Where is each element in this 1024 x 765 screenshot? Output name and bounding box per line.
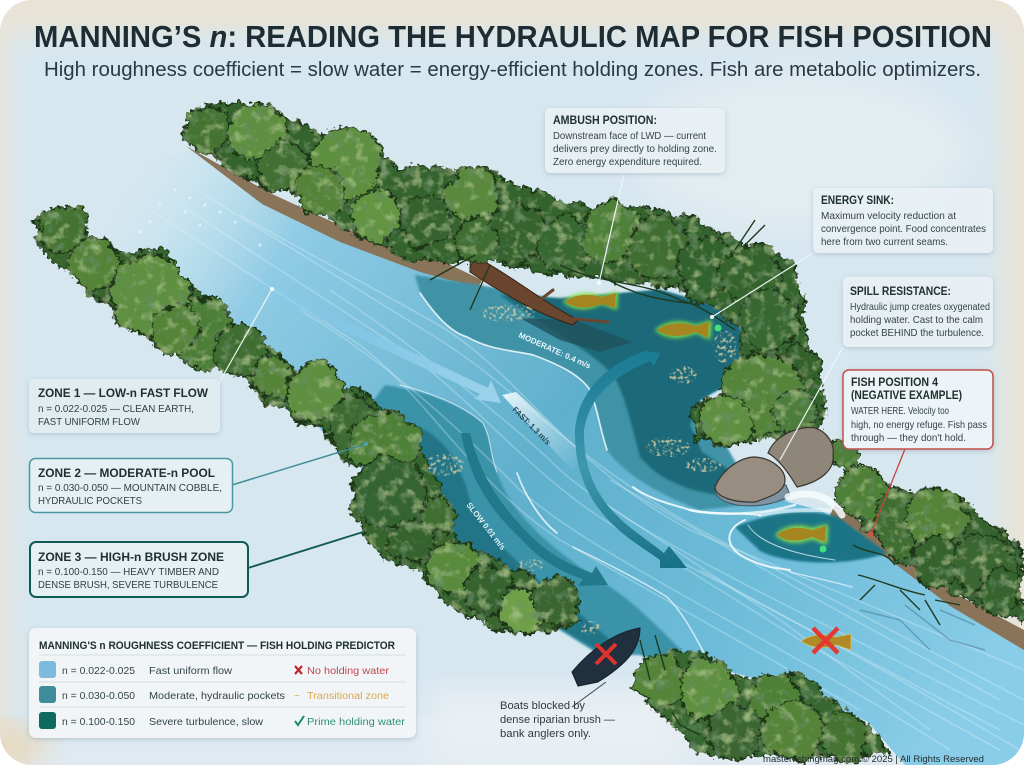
callout: energy sink: convergence point. Food concentrates [821, 223, 986, 235]
legend row 3 [39, 712, 406, 729]
rocks [715, 427, 833, 506]
leader: ambush [597, 174, 624, 285]
callout: zone 2: HYDRAULIC POCKETS [38, 496, 142, 507]
legend row 3: Severe turbulence, slow [149, 716, 263, 728]
title: MANNING’S n: READING THE HYDRAULIC MAP FOR FISH POSITION [34, 19, 992, 54]
moderate-n band lower [362, 384, 684, 658]
water streaks [150, 195, 1024, 750]
vegetation: left bank [32, 204, 580, 636]
eddy behind rocks [735, 512, 887, 563]
foam: hydraulic jump [690, 494, 842, 515]
legend row 2: n = 0.030-0.050 [62, 690, 135, 702]
callout: energy sink: here from two current seams. [821, 236, 948, 248]
legend row 1: n = 0.022-0.025 [62, 665, 135, 677]
velocity labels: SLOW 0.01 m/s [464, 501, 508, 552]
underwater log shadow [520, 318, 632, 352]
callout: zone 1: ZONE 1 — LOW-n FAST FLOW [38, 386, 209, 400]
legend row 2 [39, 686, 389, 703]
callout: spill resistance: SPILL RESISTANCE: [850, 284, 951, 298]
river [90, 146, 1024, 765]
leader: fish position 4 [868, 449, 905, 537]
moderate-n band upper [415, 275, 790, 510]
leader: zone 2 [232, 442, 368, 485]
high-n pool lower [400, 425, 610, 652]
fish: energy sink [655, 320, 712, 340]
callout: fish position 4 [843, 370, 993, 449]
gravel patches [425, 304, 737, 635]
arrow: slow current [461, 433, 608, 586]
subtitle: High roughness coefficient = slow water = energy-efficient holding zones. Fish are metabolic optimizers. [44, 59, 981, 81]
legend row 1: Fast uniform flow [149, 665, 232, 677]
callout: energy sink: ENERGY SINK: [821, 193, 894, 207]
callout: spill resistance: Hydraulic jump creates oxygenated [850, 301, 990, 313]
marker: energy sink [714, 324, 722, 332]
boats note [500, 700, 615, 740]
legend row 2: Transitional zone [307, 690, 389, 702]
callout: zone 3: DENSE BRUSH, SEVERE TURBULENCE [38, 580, 218, 591]
callout: zone 2 [30, 458, 232, 512]
log: large woody debris [470, 258, 608, 325]
boats note: dense riparian brush — [500, 714, 615, 726]
submerged branches [430, 220, 960, 735]
boat [572, 628, 640, 686]
legend title: MANNING'S n ROUGHNESS COEFFICIENT — FISH HOLDING PREDICTOR [39, 640, 395, 652]
callout: fish position 4: WATER HERE. Velocity too [851, 405, 949, 417]
fast label band [502, 392, 585, 470]
legend row 1 [39, 661, 390, 678]
boats note: bank anglers only. [500, 728, 591, 740]
leader: boats [572, 682, 606, 707]
arrow: fast current [230, 268, 585, 470]
legend row 2: Moderate, hydraulic pockets [149, 690, 285, 702]
callout: fish position 4: high, no energy refuge. Fish pass [851, 419, 987, 431]
fish: negative example [801, 628, 851, 653]
callout: zone 2: ZONE 2 — MODERATE-n POOL [38, 466, 215, 480]
callout: fish position 4: (NEGATIVE EXAMPLE) [851, 388, 962, 402]
legend row 1: No holding water [307, 665, 390, 677]
callout: fish position 4: FISH POSITION 4 [851, 375, 938, 389]
legend row 3: n = 0.100-0.150 [62, 716, 135, 728]
legend row 2: ~ [294, 690, 300, 702]
callout: zone 3: ZONE 3 — HIGH-n BRUSH ZONE [38, 550, 224, 564]
callout: spill resistance: pocket BEHIND the turbulence. [850, 327, 984, 339]
boats note: Boats blocked by [500, 700, 585, 712]
high-n pool upper [500, 290, 752, 498]
fish: spill resistance [775, 524, 828, 545]
callout: zone 1: FAST UNIFORM FLOW [38, 417, 141, 428]
callout: zone 1: n = 0.022-0.025 — CLEAN EARTH, [38, 404, 194, 415]
arrow: S-shaped eddy and main current [575, 351, 687, 568]
fish: ambush position [563, 291, 618, 310]
fast water channel [90, 150, 1024, 765]
velocity labels: MODERATE: 0.4 m/s [517, 331, 593, 371]
leader: zone 3 [248, 532, 363, 568]
callout: zone 3: n = 0.100-0.150 — HEAVY TIMBER AND [38, 567, 219, 578]
velocity labels [464, 331, 593, 552]
marker: spill resistance [820, 546, 826, 552]
white current lines [400, 293, 852, 670]
river banks [186, 146, 1024, 650]
callout: fish position 4: through — they don't hold. [851, 432, 966, 444]
callout: ambush position: Zero energy expenditure required. [553, 156, 702, 168]
branch reflections [860, 605, 985, 650]
callout: ambush position [545, 108, 725, 173]
vegetation: lower right bank [839, 466, 1022, 622]
callout: zone 3 [30, 542, 248, 597]
leader: energy sink [710, 253, 813, 319]
leader: zone 1 [220, 287, 274, 381]
legend [29, 628, 416, 738]
legend row 3: Prime holding water [307, 716, 406, 728]
callout: spill resistance [843, 277, 993, 347]
callout: energy sink: Maximum velocity reduction at [821, 210, 956, 222]
sparkles [138, 188, 262, 246]
callout: ambush position: Downstream face of LWD — current [553, 130, 706, 142]
leader: spill resistance [780, 347, 843, 460]
vegetation: lower bank [632, 652, 890, 762]
watermark: masterfishingmag.com © 2025 | All Rights Reserved [763, 754, 984, 765]
vegetation: upper bank [182, 102, 859, 469]
callout: ambush position: AMBUSH POSITION: [553, 113, 657, 127]
callout: ambush position: delivers prey directly to holding zone. [553, 143, 717, 155]
callout: spill resistance: holding water. Cast to the calm [850, 314, 983, 326]
callout: energy sink [813, 188, 993, 253]
callout: zone 1 [29, 379, 220, 433]
callout: zone 2: n = 0.030-0.050 — MOUNTAIN COBBLE, [38, 483, 222, 494]
velocity labels: FAST: 1.3 m/s [511, 405, 553, 447]
